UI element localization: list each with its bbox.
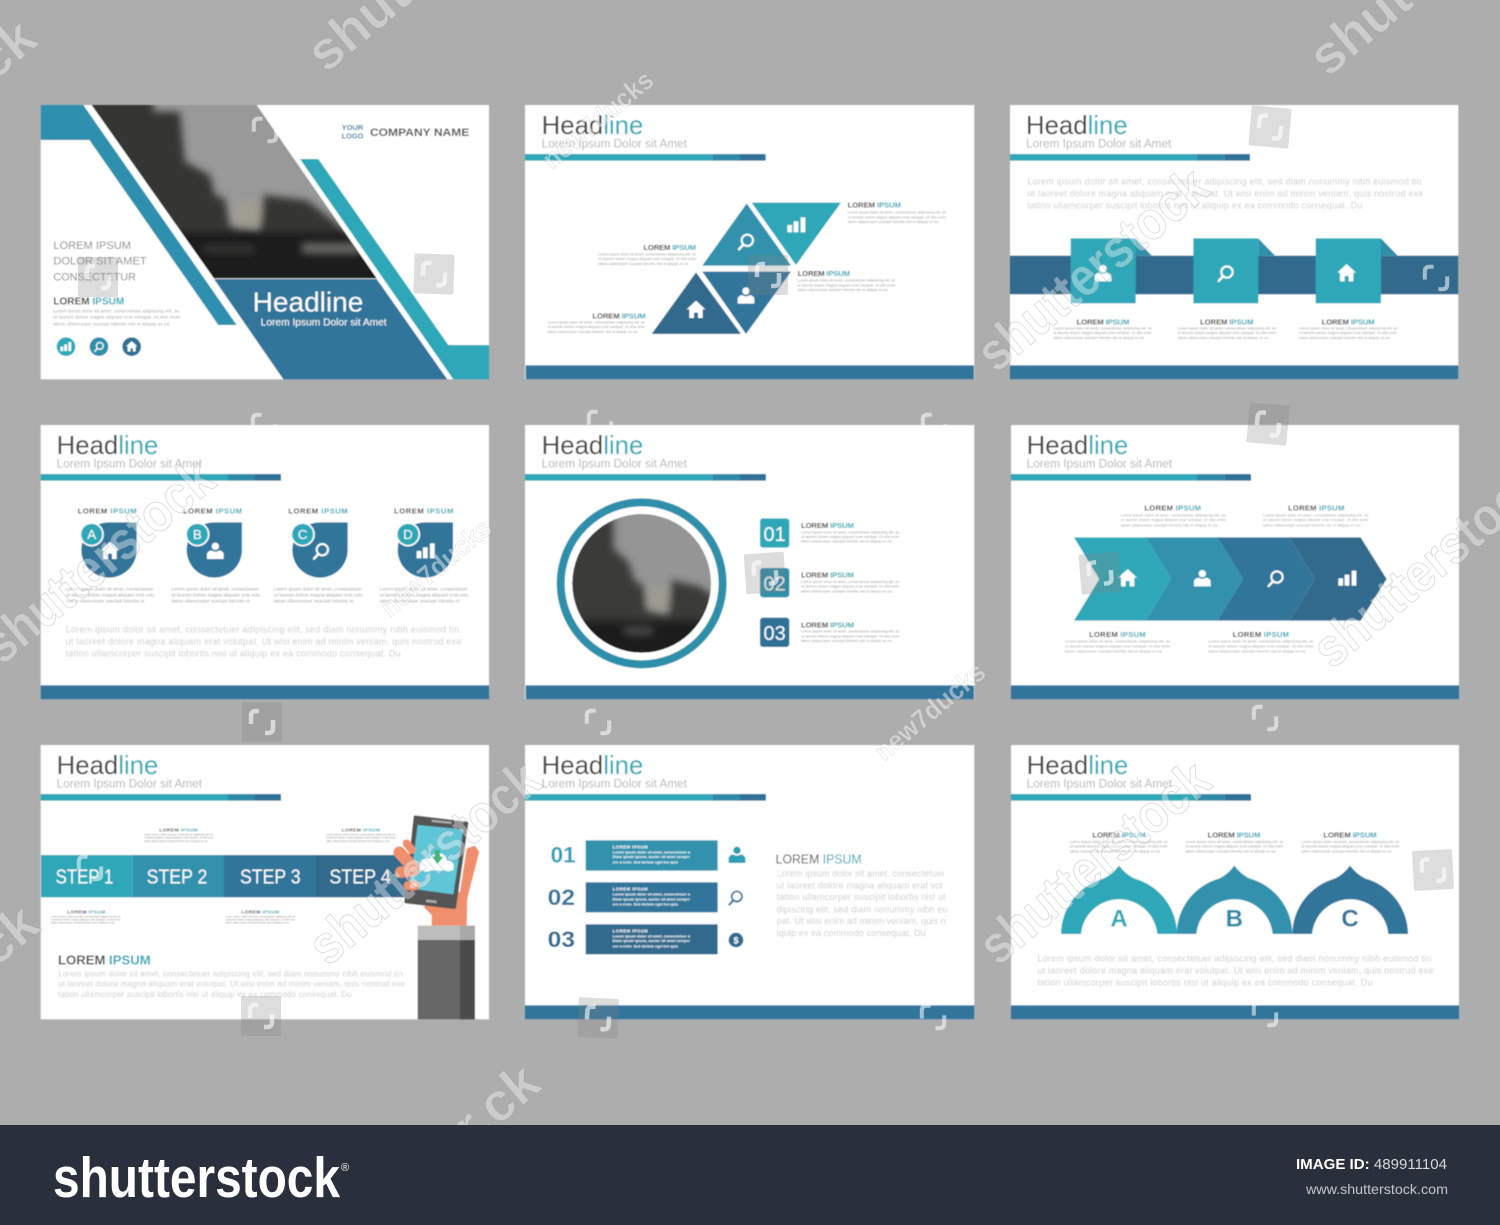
- text: top right: LOREM IPSUM: [848, 201, 901, 210]
- text: top first: [1121, 504, 1226, 527]
- panel: chevron arrow slide: [1011, 425, 1459, 699]
- text 02: LOREM IPSUM: [801, 571, 854, 580]
- number 02: 02: [764, 573, 786, 595]
- row 02: Diam ipsum ipsum, auctor sit amet semper: [613, 897, 691, 901]
- arrow segment: home: [1074, 537, 1171, 621]
- item C: [274, 506, 363, 604]
- text C: ut laoreet dolore magna aliquam erat volutpat. Ut wisi enim: [1301, 845, 1399, 849]
- row 03: Diam ipsum ipsum, auctor sit amet semper: [613, 939, 691, 943]
- row 03: Lorem ipsum dolor sit amet, consectetuer a: [613, 934, 691, 938]
- heading: [41, 430, 281, 481]
- side body text: Lorem ipsum dolor sit amet, consectetuer: [777, 868, 945, 878]
- row 02: LOREM IPSUM: [613, 887, 648, 892]
- item C: LOREM IPSUM: [288, 506, 348, 515]
- left text block: Lorem ipsum dolor sit amet, consectetuer adipiscing elit, se: [53, 309, 180, 314]
- number 03: [760, 618, 789, 647]
- body text: Lorem ipsum dolor sit amet, consectetuer adipiscing elit, sed diam nonummy nibh euismod tin: [66, 625, 459, 635]
- body text: [66, 625, 461, 659]
- slide background: [41, 105, 489, 379]
- panel: triangles slide: [525, 105, 974, 379]
- square: home: [1316, 238, 1398, 303]
- text: top right: [848, 201, 946, 224]
- arrow segment: person: [1146, 537, 1243, 621]
- text B: ut laoreet dolore magna aliquam erat volutpat. Ut wisi enim: [1185, 845, 1283, 849]
- text 02: ut laoreet dolore magna aliquam erat volutpat. Ut wisi enim: [801, 585, 899, 589]
- watermark overlays: shutterstock: [297, 748, 552, 976]
- text: top second: ut laoreet dolore magna aliquam erat volutpat. Ut wisi enim: [1263, 518, 1368, 522]
- heading: [1010, 110, 1250, 161]
- panel: steps slide: [41, 745, 489, 1019]
- text 03: ut laoreet dolore magna aliquam erat volutpat. Ut wisi enim: [801, 634, 899, 638]
- square: search: [1193, 238, 1275, 303]
- row 01: LOREM IPSUM: [613, 844, 648, 849]
- text: bottom left: [547, 311, 646, 334]
- step 4: STEP 4: [329, 865, 391, 888]
- text: bottom left: LOREM IPSUM: [592, 311, 646, 320]
- text 03: tation ullamcorper suscipit lobortis nisl ut aliquip ex ea: [801, 639, 893, 643]
- row 01: ure a enim. Sed dictum eget leo quis: [613, 860, 678, 864]
- side body text: pat. Ut wisi enim ad minim veniam, quis n: [777, 916, 946, 926]
- small text: top first: [144, 828, 214, 843]
- left title: LOREM IPSUM: [53, 240, 131, 252]
- icon: person: [729, 847, 745, 863]
- text 03: LOREM IPSUM: [801, 620, 854, 629]
- heading: Headline: [542, 110, 643, 140]
- arch A: A: [1110, 906, 1128, 933]
- right teal ribbon: [300, 159, 489, 379]
- left text block: ut laoreet dolore magna aliquam erat volutpat. Ut wisi enim: [53, 315, 180, 320]
- text: top first: Lorem ipsum dolor sit amet, consectetuer adipiscing elit, se: [1121, 513, 1226, 517]
- watermark overlays: shutterstock: [967, 748, 1222, 976]
- heading: Lorem Ipsum Dolor sit Amet: [1026, 136, 1172, 150]
- text C: Lorem ipsum dolor sit amet, consectetuer adipiscing elit, se: [1301, 840, 1399, 844]
- text: bottom first: [1065, 630, 1170, 654]
- text: third: [1299, 317, 1397, 340]
- item C: C: [298, 527, 308, 542]
- heading: Lorem Ipsum Dolor sit Amet: [1027, 776, 1173, 790]
- text: top first: LOREM IPSUM: [1144, 504, 1201, 513]
- body text: Lorem ipsum dolor sit amet, consectetuer adipiscing elit, sed diam nonummy nibh euismod tin: [1027, 176, 1422, 186]
- small text: top first: ut laoreet dolore magna aliquam erat volutpat. Ut wisi enim: [144, 836, 214, 840]
- step 3: [224, 855, 316, 897]
- small text: top second: ut laoreet dolore magna aliquam erat volutpat. Ut wisi enim: [326, 836, 396, 840]
- heading: Lorem Ipsum Dolor sit Amet: [542, 776, 688, 790]
- triangle: bars: [752, 203, 841, 265]
- arch B: B: [1226, 906, 1243, 933]
- small text: bottom second: LOREM IPSUM: [241, 909, 279, 915]
- text: middle right: LOREM IPSUM: [798, 269, 850, 278]
- body text: [1037, 954, 1433, 988]
- text 02: [801, 571, 899, 593]
- small text: top second: Lorem ipsum dolor sit amet, consectetuer adipiscing elit, se: [326, 833, 396, 837]
- text A: ut laoreet dolore magna aliquam erat volutpat. Ut wisi enim: [1070, 845, 1168, 849]
- text: first: tation ullamcorper suscipit lobortis nisl ut aliquip ex ea: [1053, 336, 1145, 340]
- heading: Headline: [57, 750, 158, 780]
- text: bottom second: Lorem ipsum dolor sit amet, consectetuer adipiscing elit, se: [1208, 640, 1313, 644]
- blue headline block: [214, 279, 447, 379]
- heading: [525, 750, 766, 801]
- item D: ut laoreet dolore magna aliquam erat volu: [380, 593, 469, 598]
- watermark overlays: r.ck: [441, 1051, 552, 1157]
- item C: Lorem ipsum dolor sit amet, consectetuer: [274, 587, 362, 592]
- item A: tation ullamcorper suscipit lobortis ni: [66, 599, 144, 604]
- body text: tation ullamcorper suscipit lobortis nisl ut aliquip ex ea commodo consequat. Du: [1037, 978, 1372, 988]
- text: bottom second: LOREM IPSUM: [1233, 630, 1289, 639]
- heading: [525, 430, 766, 481]
- text: bottom second: ut laoreet dolore magna aliquam erat volutpat. Ut wisi enim: [1208, 644, 1313, 648]
- logo: YOUR: [342, 123, 364, 132]
- left text block: LOREM IPSUM: [53, 296, 124, 307]
- row 02: Lorem ipsum dolor sit amet, consectetuer a: [613, 893, 691, 897]
- text A: tation ullamcorper suscipit lobortis nisl ut aliquip ex ea: [1070, 849, 1161, 853]
- text: top right: ut laoreet dolore magna aliquam erat volutpat. Ut wisi enim: [848, 215, 946, 219]
- triangle: search: [702, 203, 791, 266]
- heading: Headline: [1026, 110, 1128, 140]
- heading: [41, 750, 281, 801]
- step 2: [132, 855, 224, 897]
- text: second: Lorem ipsum dolor sit amet, consectetuer adipiscing elit, se: [1178, 327, 1276, 331]
- text: left: tation ullamcorper suscipit lobortis nisl ut aliquip ex ea: [598, 262, 689, 266]
- arch A: [1061, 866, 1177, 934]
- row 02: ure a enim. Sed dictum eget leo quis: [613, 903, 678, 907]
- text: bottom first: tation ullamcorper suscipit lobortis nisl ut aliquip ex ea: [1065, 650, 1163, 654]
- item C: ut laoreet dolore magna aliquam erat volu: [274, 593, 363, 598]
- image id: IMAGE ID: 489911104: [1296, 1156, 1447, 1173]
- logo: LOGO: [342, 132, 364, 141]
- small text: top first: LOREM IPSUM: [159, 828, 198, 834]
- arrow segment: search: [1217, 537, 1315, 621]
- side body text: dipiscing elit, sed diam nonummy nibh eu: [777, 904, 948, 914]
- item D: D: [403, 527, 413, 542]
- item B: [171, 506, 260, 604]
- row 02: 02: [548, 885, 575, 910]
- logo: [342, 123, 364, 141]
- text: left: LOREM IPSUM: [643, 243, 696, 252]
- small text: bottom second: [226, 909, 296, 925]
- heading: Headline: [542, 750, 643, 780]
- cover headline: Lorem Ipsum Dolor sit Amet: [261, 318, 387, 329]
- heading: Headline: [57, 430, 158, 460]
- left title: CONSECTETUR: [53, 271, 136, 283]
- text: top second: Lorem ipsum dolor sit amet, consectetuer adipiscing elit, se: [1263, 513, 1368, 517]
- text: bottom second: tation ullamcorper suscipit lobortis nisl ut aliquip ex ea: [1208, 650, 1306, 654]
- text B: tation ullamcorper suscipit lobortis nisl ut aliquip ex ea: [1185, 849, 1276, 853]
- footer bar: [525, 1005, 974, 1019]
- text 01: ut laoreet dolore magna aliquam erat volutpat. Ut wisi enim: [801, 535, 899, 539]
- slide background: [1011, 745, 1459, 1019]
- heading: Lorem Ipsum Dolor sit Amet: [57, 776, 203, 790]
- item A: A: [87, 527, 96, 542]
- panel: shields slide: [41, 425, 489, 699]
- icon: search: [729, 891, 742, 905]
- body text: ut laoreet dolore magna aliquam erat volutpat. Ut wisi enim ad minim veniam, quis nostrud exe: [66, 637, 461, 647]
- heading: Lorem Ipsum Dolor sit Amet: [57, 456, 203, 470]
- step 2: STEP 2: [147, 865, 207, 888]
- number 02: [760, 568, 789, 597]
- step 4: [316, 855, 407, 897]
- text 01: tation ullamcorper suscipit lobortis nisl ut aliquip ex ea: [801, 540, 893, 544]
- text: middle right: ut laoreet dolore magna aliquam erat volutpat. Ut wisi enim: [798, 283, 895, 287]
- item B: LOREM IPSUM: [183, 506, 242, 515]
- small text: bottom second: Lorem ipsum dolor sit amet, consectetuer adipiscing elit, se: [226, 914, 296, 918]
- footer bar: [1010, 365, 1458, 379]
- body text: ut laoreet dolore magna aliquam erat volutpat. Ut wisi enim ad minim veniam, quis nostrud exe: [1027, 188, 1423, 198]
- text 01: [801, 521, 899, 544]
- small text: bottom first: tation ullamcorper suscipit lobortis nisl ut aliquip ex ea: [51, 921, 115, 925]
- arch C: [1292, 866, 1408, 934]
- text: bottom first: Lorem ipsum dolor sit amet, consectetuer adipiscing elit, se: [1065, 640, 1170, 644]
- text: second: [1178, 317, 1276, 340]
- icon: dollar: [729, 933, 743, 947]
- text A: [1070, 830, 1168, 853]
- text: second: LOREM IPSUM: [1200, 317, 1253, 326]
- body text: ut laoreet dolore magna aliquam erat volutpat. Ut wisi enim ad minim veniam, quis nostrud exe: [1037, 966, 1433, 976]
- text C: LOREM IPSUM: [1323, 830, 1377, 839]
- heading: Lorem Ipsum Dolor sit Amet: [1027, 456, 1173, 470]
- text: bottom first: ut laoreet dolore magna aliquam erat volutpat. Ut wisi enim: [1065, 644, 1170, 648]
- item A: Lorem ipsum dolor sit amet, consectetuer: [66, 587, 154, 592]
- row 03: LOREM IPSUM: [613, 928, 648, 933]
- watermark overlays: shutterstock: [965, 155, 1220, 383]
- small text: bottom first: ut laoreet dolore magna aliquam erat volutpat. Ut wisi enim: [51, 917, 121, 921]
- slide background: [525, 745, 974, 1019]
- slide background: [1010, 105, 1458, 379]
- cover headline: Headline: [253, 287, 363, 318]
- top-left teal ribbon: [41, 105, 237, 325]
- ribbon band: [1010, 256, 1458, 294]
- small text: bottom first: Lorem ipsum dolor sit amet, consectetuer adipiscing elit, se: [51, 914, 121, 918]
- text: top first: ut laoreet dolore magna aliquam erat volutpat. Ut wisi enim: [1121, 518, 1226, 522]
- step 1: [41, 855, 132, 897]
- number 01: 01: [764, 524, 786, 546]
- text: bottom second: [1208, 630, 1313, 654]
- panel: circle photo slide: [525, 425, 974, 699]
- item B: ut laoreet dolore magna aliquam erat volu: [171, 593, 260, 598]
- text B: Lorem ipsum dolor sit amet, consectetuer adipiscing elit, se: [1185, 840, 1283, 844]
- row 01: [551, 840, 718, 871]
- row 01: Diam ipsum ipsum, auctor sit amet semper: [613, 855, 691, 859]
- text: bottom first: LOREM IPSUM: [1089, 630, 1146, 639]
- left title: [53, 240, 147, 283]
- row 03: ure a enim. Sed dictum eget leo quis: [613, 944, 678, 948]
- side body text: iquip ex ea commodo consequat. Du: [777, 928, 926, 938]
- triangle: person: [702, 272, 791, 334]
- text: first: ut laoreet dolore magna aliquam erat volutpat. Ut wisi enim: [1053, 331, 1152, 335]
- text: third: tation ullamcorper suscipit lobortis nisl ut aliquip ex ea: [1299, 336, 1391, 340]
- arch C: C: [1341, 906, 1359, 933]
- panel: arches slide: [1011, 745, 1459, 1019]
- body text: ut laoreet dolore magna aliquam erat volutpat. Ut wisi enim ad minim veniam, quis nostrud exe: [58, 980, 406, 989]
- panel: cover slide: [41, 88, 489, 379]
- icon: dollar: $: [733, 935, 739, 945]
- arch B: [1177, 866, 1292, 934]
- row 03: [548, 924, 718, 954]
- text: third: ut laoreet dolore magna aliquam erat volutpat. Ut wisi enim: [1299, 331, 1397, 335]
- cover headline: [253, 287, 387, 329]
- blurred city photo: [91, 104, 377, 280]
- number 01: [760, 518, 789, 548]
- text: middle right: [798, 269, 895, 292]
- text: top right: Lorem ipsum dolor sit amet, consectetuer adipiscing elit, se: [848, 210, 946, 214]
- text: first: [1053, 317, 1152, 340]
- brand logo: shutterstock: [53, 1146, 340, 1210]
- bottom brand bar: [0, 1125, 1500, 1225]
- body text: tation ullamcorper suscipit lobortis nisl ut aliquip ex ea commodo consequat. Du: [1027, 200, 1362, 210]
- body text: tation ullamcorper suscipit lobortis nisl ut aliquip ex ea commodo consequat. Du: [66, 649, 401, 659]
- icon: bars button: [57, 337, 75, 356]
- side heading: LOREM IPSUM: [776, 851, 862, 866]
- heading: Lorem Ipsum Dolor sit Amet: [542, 136, 688, 150]
- small text: top first: Lorem ipsum dolor sit amet, consectetuer adipiscing elit, se: [144, 833, 214, 837]
- body text: Lorem ipsum dolor sit amet, consectetuer adipiscing elit, sed diam nonummy nibh euismod tin: [1037, 954, 1431, 964]
- text A: Lorem ipsum dolor sit amet, consectetuer adipiscing elit, se: [1070, 840, 1168, 844]
- text: first: Lorem ipsum dolor sit amet, consectetuer adipiscing elit, se: [1053, 327, 1152, 331]
- footer bar: [526, 365, 974, 379]
- heading: Headline: [542, 430, 643, 460]
- text A: LOREM IPSUM: [1092, 830, 1146, 839]
- side body text: [777, 868, 948, 938]
- small text: bottom second: tation ullamcorper suscipit lobortis nisl ut aliquip ex ea: [226, 921, 289, 925]
- body text: Lorem ipsum dolor sit amet, consectetuer adipiscing elit, sed diam nonummy nibh euismod tin: [58, 969, 403, 978]
- triangle: home: [652, 272, 741, 334]
- body text: [58, 969, 406, 999]
- text: bottom left: Lorem ipsum dolor sit amet, consectetuer adipiscing elit, se: [547, 321, 645, 325]
- text 03: [801, 620, 899, 643]
- icon: home button: [122, 337, 141, 356]
- text: top right: tation ullamcorper suscipit lobortis nisl ut aliquip ex ea: [848, 220, 939, 224]
- icon: search button: [90, 337, 108, 356]
- left text block: [53, 296, 180, 326]
- heading: Headline: [1027, 750, 1128, 780]
- small text: top first: tation ullamcorper suscipit lobortis nisl ut aliquip ex ea: [144, 839, 208, 843]
- heading: [525, 110, 766, 161]
- text: middle right: Lorem ipsum dolor sit amet, consectetuer adipiscing elit, se: [798, 279, 895, 283]
- number 03: 03: [764, 623, 786, 645]
- text: middle right: tation ullamcorper suscipit lobortis nisl ut aliquip ex ea: [798, 288, 889, 292]
- text 02: Lorem ipsum dolor sit amet, consectetuer adipiscing elit, se: [801, 580, 899, 584]
- text 03: Lorem ipsum dolor sit amet, consectetuer adipiscing elit, se: [801, 630, 899, 634]
- text 01: LOREM IPSUM: [801, 521, 854, 530]
- footer bar: [526, 685, 974, 699]
- text: top second: [1263, 504, 1368, 527]
- item A: LOREM IPSUM: [78, 506, 137, 515]
- small text: bottom first: [51, 909, 121, 925]
- slide background: [1011, 425, 1459, 699]
- heading: [1011, 430, 1251, 481]
- small text: top second: tation ullamcorper suscipit lobortis nisl ut aliquip ex ea: [326, 839, 390, 843]
- footer bar: [1011, 685, 1459, 699]
- text B: LOREM IPSUM: [1208, 830, 1260, 839]
- side body text: tation ullamcorper suscipit lobortis nisl ut: [777, 892, 946, 902]
- row 02: [548, 882, 718, 912]
- circle ring: [561, 502, 723, 664]
- body text: tation ullamcorper suscipit lobortis nisl ut aliquip ex ea commodo consequat. Du: [58, 990, 352, 999]
- text: bottom left: tation ullamcorper suscipit lobortis nisl ut aliquip ex ea: [547, 330, 638, 334]
- heading: [1011, 750, 1251, 801]
- item B: B: [193, 527, 202, 542]
- item D: LOREM IPSUM: [394, 506, 453, 515]
- row 01: Lorem ipsum dolor sit amet, consectetuer a: [613, 850, 691, 854]
- text B: [1185, 830, 1283, 853]
- left text block: tation ullamcorper suscipit lobortis nisl ut aliquip ex ea: [53, 321, 170, 326]
- text: second: tation ullamcorper suscipit lobortis nisl ut aliquip ex ea: [1178, 336, 1269, 340]
- heading: Headline: [1027, 430, 1128, 460]
- text C: tation ullamcorper suscipit lobortis nisl ut aliquip ex ea: [1301, 849, 1392, 853]
- text: third: Lorem ipsum dolor sit amet, consectetuer adipiscing elit, se: [1299, 327, 1397, 331]
- heading: Lorem Ipsum Dolor sit Amet: [542, 456, 688, 470]
- item B: tation ullamcorper suscipit lobortis ni: [171, 599, 250, 604]
- lorem ipsum subheading: LOREM IPSUM: [58, 953, 151, 967]
- item A: ut laoreet dolore magna aliquam erat volu: [66, 593, 155, 598]
- text: bottom left: ut laoreet dolore magna aliquam erat volutpat. Ut wisi enim: [547, 325, 645, 329]
- row 01: 01: [551, 842, 576, 867]
- text: left: Lorem ipsum dolor sit amet, consectetuer adipiscing elit, se: [598, 253, 696, 257]
- item D: [380, 506, 469, 604]
- text: first: LOREM IPSUM: [1077, 317, 1129, 326]
- text C: [1301, 830, 1399, 853]
- item C: tation ullamcorper suscipit lobortis ni: [274, 599, 353, 604]
- item A: [66, 506, 155, 604]
- row 03: 03: [548, 927, 575, 952]
- slide background: [41, 745, 489, 1019]
- slide background: [525, 425, 974, 699]
- text: top second: LOREM IPSUM: [1288, 504, 1344, 513]
- step 1: STEP 1: [56, 865, 113, 888]
- text: second: ut laoreet dolore magna aliquam erat volutpat. Ut wisi enim: [1178, 331, 1276, 335]
- text 02: tation ullamcorper suscipit lobortis nisl ut aliquip ex ea: [801, 589, 893, 593]
- body text: [1027, 176, 1423, 210]
- panel: ribbon squares slide: [1010, 105, 1458, 379]
- text: top first: tation ullamcorper suscipit lobortis nisl ut aliquip ex ea: [1121, 523, 1218, 527]
- illustration: hand holding phone: [399, 817, 479, 1019]
- circular blurred photo: [572, 514, 712, 654]
- footer bar: [41, 685, 489, 699]
- small text: bottom first: LOREM IPSUM: [67, 909, 105, 915]
- watermark overlays: new7ducks: [537, 65, 659, 175]
- panel: numbered list slide: [525, 745, 974, 1019]
- side body text: ut laoreet dolore magna aliquam erat vol: [777, 880, 942, 890]
- footer bar: [1011, 1005, 1459, 1019]
- website: www.shutterstock.com: [1305, 1181, 1448, 1197]
- arrow segment: bars: [1289, 537, 1387, 621]
- registered mark: ®: [341, 1162, 349, 1174]
- text: left: [598, 243, 696, 266]
- text: third: LOREM IPSUM: [1322, 317, 1375, 326]
- item D: tation ullamcorper suscipit lobortis ni: [380, 599, 459, 604]
- small text: bottom second: ut laoreet dolore magna aliquam erat volutpat. Ut wisi enim: [226, 917, 296, 921]
- watermark overlays: new7ducks: [869, 657, 991, 767]
- slide background: [525, 105, 974, 379]
- text 01: Lorem ipsum dolor sit amet, consectetuer adipiscing elit, se: [801, 530, 899, 534]
- small text: top second: [326, 828, 396, 843]
- item D: Lorem ipsum dolor sit amet, consectetuer: [380, 587, 468, 592]
- step 3: STEP 3: [240, 865, 301, 888]
- watermark overlays: new7ducks: [375, 513, 497, 623]
- slide background: [41, 425, 489, 699]
- left title: DOLOR SIT AMET: [53, 256, 147, 268]
- text: left: ut laoreet dolore magna aliquam erat volutpat. Ut wisi enim: [598, 257, 696, 261]
- company name: COMPANY NAME: [370, 127, 469, 139]
- square: person: [1071, 238, 1152, 303]
- item B: Lorem ipsum dolor sit amet, consectetuer: [171, 587, 259, 592]
- text: top second: tation ullamcorper suscipit lobortis nisl ut aliquip ex ea: [1263, 523, 1361, 527]
- small text: top second: LOREM IPSUM: [342, 828, 380, 834]
